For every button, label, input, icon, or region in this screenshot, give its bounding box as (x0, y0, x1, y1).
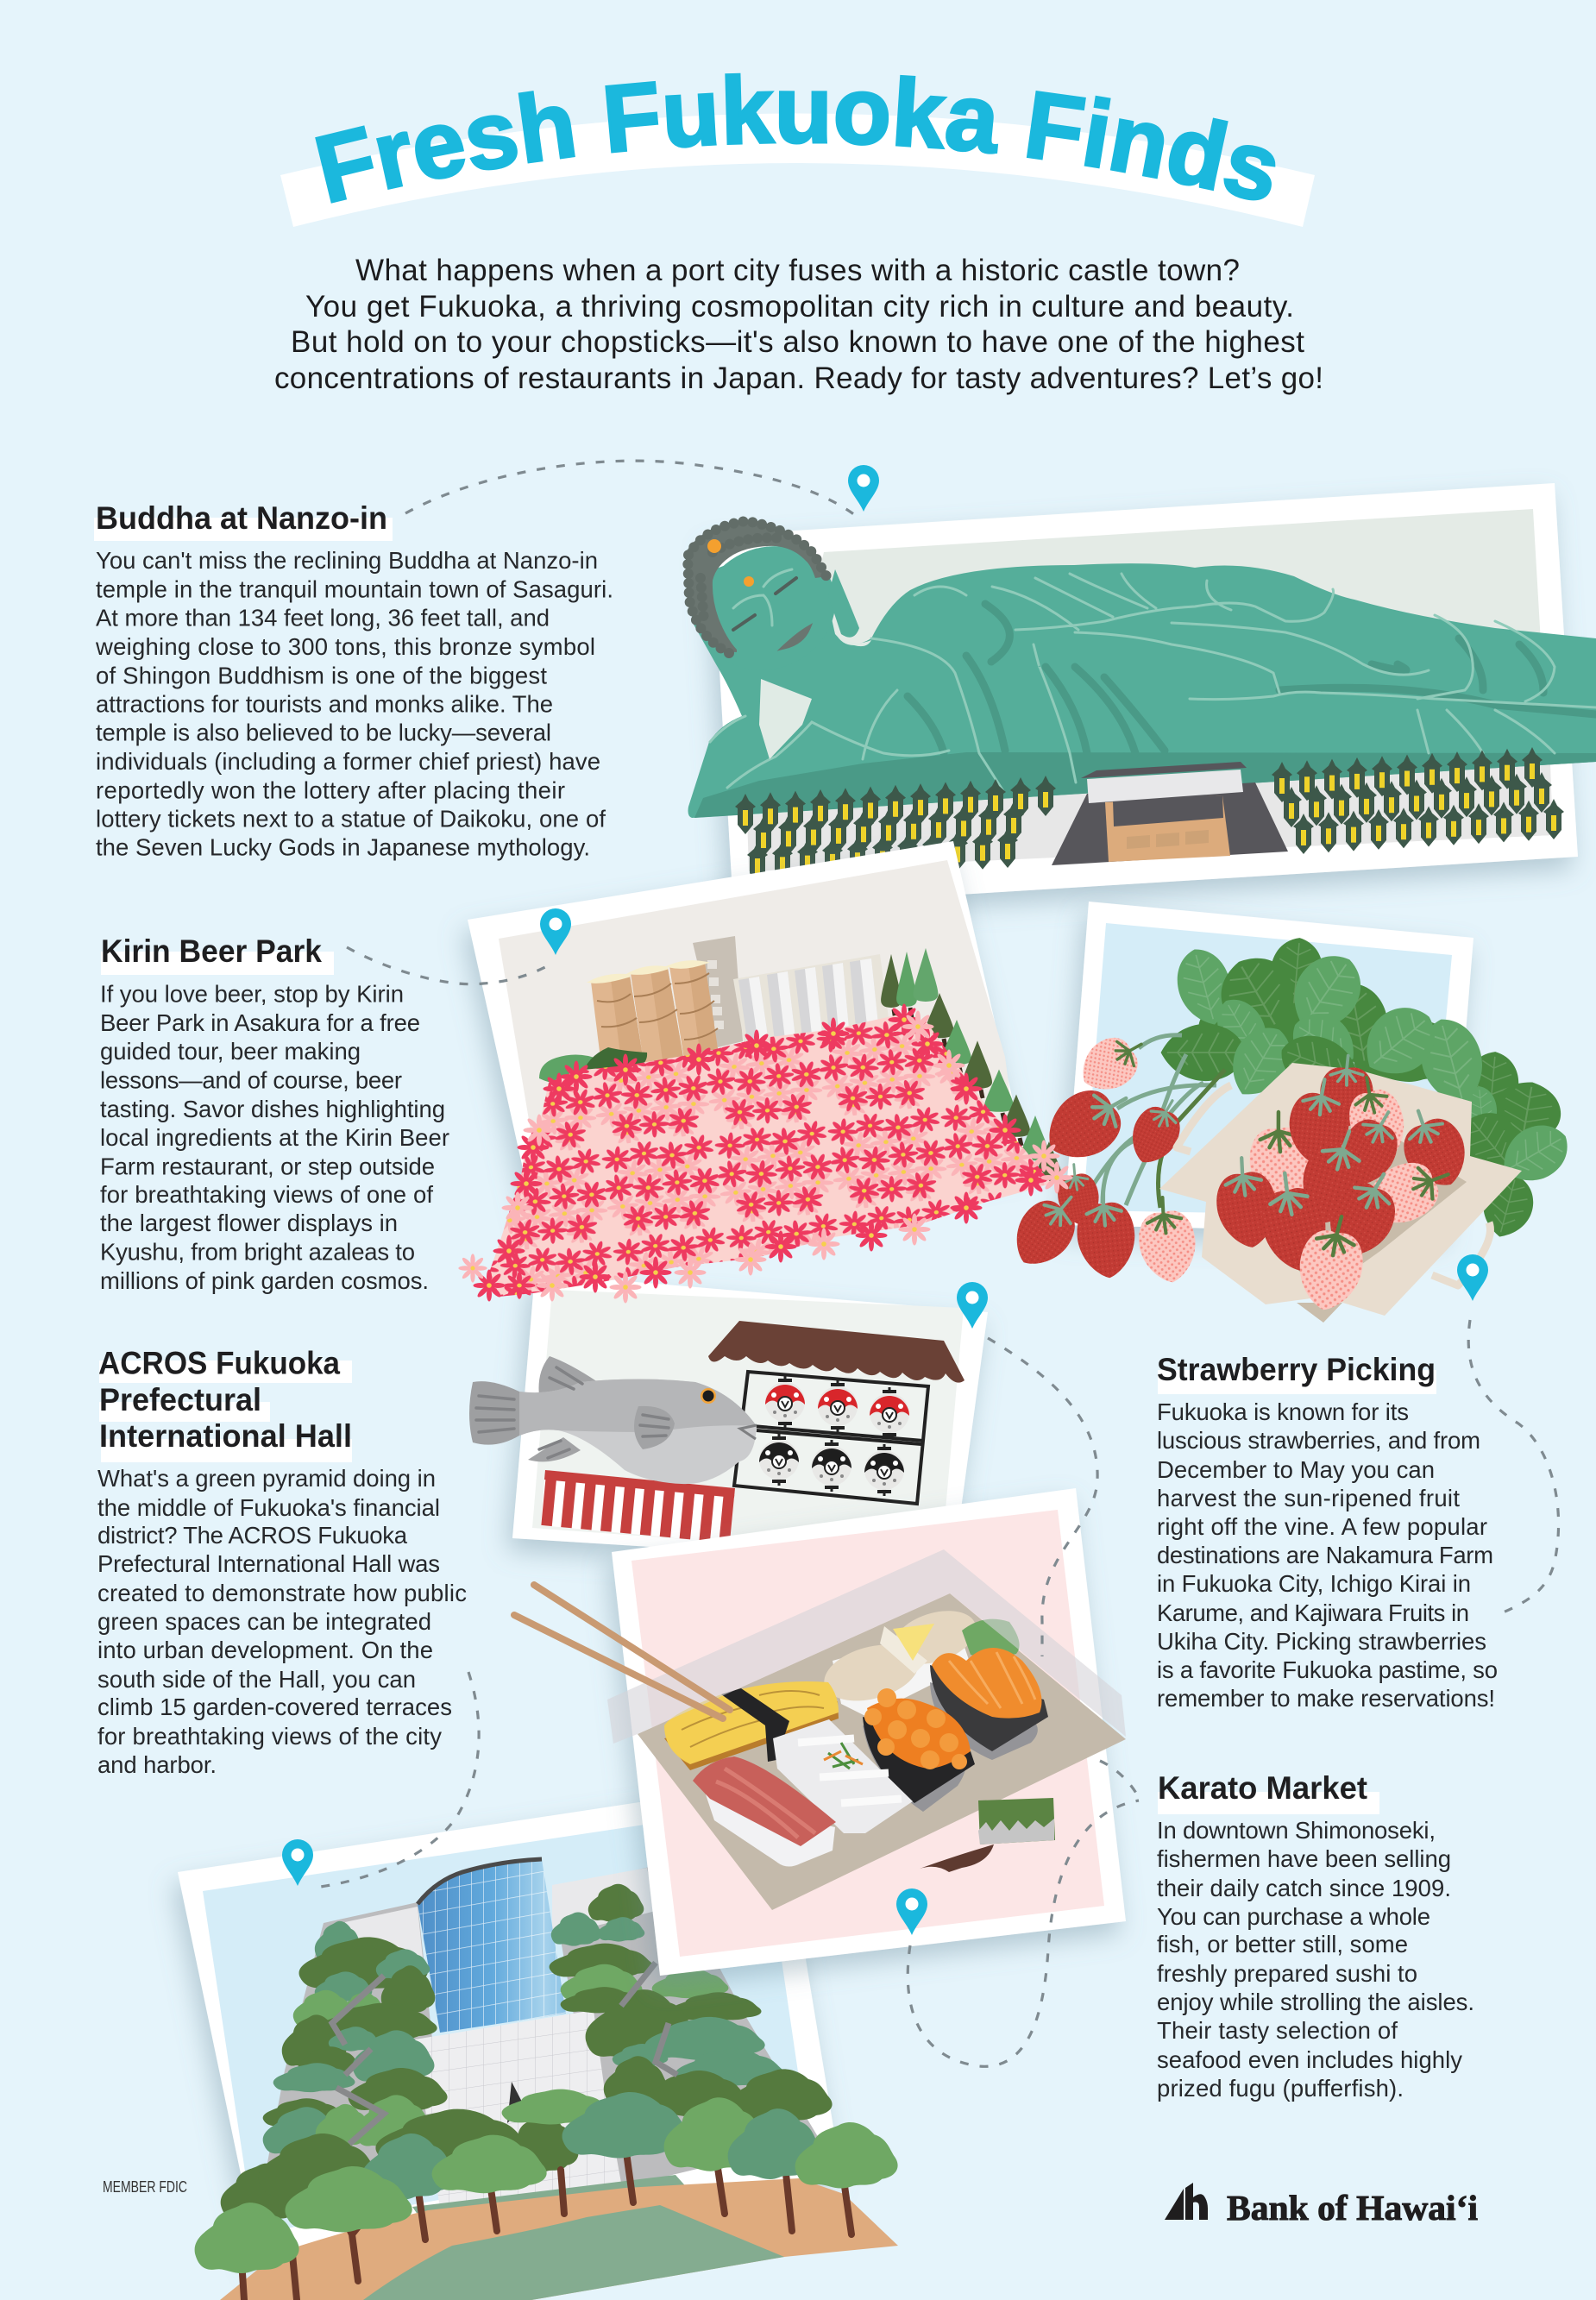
body text: fishermen have been selling (1157, 1845, 1451, 1872)
body text: temple is also believed to be lucky—several (96, 720, 551, 746)
foreground trees (195, 2089, 898, 2300)
brewery buildings (591, 936, 889, 1065)
body text: December to May you can (1157, 1456, 1435, 1483)
conifer trees (881, 948, 1062, 1181)
dashed route: ACROS (314, 1672, 479, 1888)
body text: harvest the sun-ripened fruit (1157, 1485, 1460, 1511)
body text (1157, 1817, 1474, 2102)
reclining Buddha statue (680, 519, 1596, 818)
body text: prized fugu (pufferfish). (1157, 2075, 1404, 2102)
body text: green spaces can be integrated (97, 1608, 431, 1635)
flower field (458, 1004, 1073, 1303)
body text (100, 981, 449, 1294)
heading: Kirin Beer Park (101, 933, 322, 969)
body text: Farm restaurant, or step outside (100, 1153, 435, 1180)
tamago nigiri (664, 1681, 839, 1770)
body text: You can't miss the reclining Buddha at Nanzo-in (96, 547, 598, 574)
body text: enjoy while strolling the aisles. (1157, 1989, 1474, 2015)
text block: Karato Market (1157, 1770, 1474, 2102)
heading: Strawberry Picking (1157, 1352, 1436, 1387)
photo frame (468, 841, 1027, 1242)
temple gate (1052, 762, 1288, 865)
intro text (274, 254, 1323, 395)
baran leaf and soy (920, 1798, 1055, 1872)
logo: Bank of Hawaii (1165, 2183, 1478, 2228)
photo frame (178, 1782, 841, 2260)
dashed route: strawberry (1468, 1320, 1559, 1613)
intro text: But hold on to your chopsticks—it's also known to have one of the highest (291, 325, 1304, 359)
photo panel: Buddha at Nanzo-in (680, 483, 1596, 908)
hanging strawberries (1002, 1023, 1201, 1286)
body text: attractions for tourists and monks alike. The (96, 691, 553, 718)
photo panel: sushi box (514, 1488, 1126, 1976)
photo panel: Karato Market stall (469, 1273, 988, 1566)
body text: millions of pink garden cosmos. (100, 1267, 429, 1294)
stone lanterns (735, 747, 1564, 883)
heading: International Hall (99, 1418, 352, 1454)
body text: Their tasty selection of (1157, 2017, 1398, 2044)
heading: ACROS Fukuoka (98, 1346, 340, 1381)
title: Fresh Fukuoka Finds: Fresh Fukuoka Finds (315, 72, 1275, 204)
body text: remember to make reservations! (1157, 1685, 1495, 1712)
heading: Karato Market (1158, 1770, 1367, 1806)
member FDIC note: MEMBER FDIC (103, 2178, 187, 2196)
body text: In downtown Shimonoseki, (1157, 1817, 1436, 1844)
body text (97, 1465, 467, 1778)
body text: fish, or better still, some (1157, 1931, 1408, 1958)
body text: temple in the tranquil mountain town of Sasaguri. (96, 576, 613, 603)
leaves (1161, 936, 1579, 1243)
cardboard box (1159, 1063, 1522, 1323)
dashed route: Buddha (405, 461, 858, 518)
body text: their daily catch since 1909. (1157, 1875, 1451, 1901)
photo frame (512, 1273, 988, 1566)
body text: lottery tickets next to a statue of Daikoku, one of (96, 806, 606, 833)
body text: At more than 134 feet long, 36 feet tall, and (96, 605, 550, 632)
pufferfish (469, 1356, 757, 1484)
body text: for breathtaking views of the city (97, 1723, 442, 1750)
body text: Beer Park in Asakura for a free (100, 1009, 420, 1036)
body text: Kyushu, from bright azaleas to (100, 1239, 415, 1266)
heading (98, 1346, 352, 1462)
body text: You can purchase a whole (1157, 1903, 1430, 1930)
dashed route: sushi (908, 1800, 1139, 2066)
body text: district? The ACROS Fukuoka (97, 1522, 408, 1549)
head and face (680, 519, 871, 692)
body text: the middle of Fukuoka's financial (97, 1494, 440, 1521)
terrace greenery (263, 1884, 833, 2156)
strawberry plant and box (1002, 936, 1579, 1323)
photo panel: strawberry backdrop (1064, 902, 1473, 1234)
white fish nigiri (773, 1719, 913, 1833)
map pin: Kirin (540, 908, 571, 955)
intro text: You get Fukuoka, a thriving cosmopolitan city rich in culture and beauty. (305, 290, 1294, 324)
wasabi (962, 1619, 1020, 1657)
body text: into urban development. On the (97, 1637, 433, 1663)
body text: and harbor. (97, 1751, 217, 1778)
tray (638, 1593, 1126, 1910)
text block: ACROS Fukuoka Prefectural International Hall (97, 1346, 467, 1778)
body text: local ingredients at the Kirin Beer (100, 1124, 449, 1151)
map pin: ACROS (282, 1839, 313, 1886)
map pin: market stall (957, 1282, 988, 1329)
body text: guided tour, beer making (100, 1038, 361, 1065)
body text: What's a green pyramid doing in (97, 1465, 436, 1492)
body text: individuals (including a former chief priest) have (96, 748, 600, 775)
heading: Buddha at Nanzo-in (96, 500, 387, 536)
red and white stall stripes (541, 1470, 735, 1543)
body text: for breathtaking views of one of (100, 1181, 433, 1208)
dashed route: Kirin (347, 947, 549, 984)
map pin: Buddha (848, 465, 879, 512)
photo panel: Kirin Beer Park (468, 841, 1062, 1242)
photo panel: ACROS Fukuoka (178, 1782, 898, 2300)
body text: Ukiha City. Picking strawberries (1157, 1628, 1486, 1655)
body text: Prefectural International Hall was (97, 1550, 440, 1577)
tuna nigiri (693, 1756, 836, 1867)
body text: created to demonstrate how public (97, 1580, 467, 1606)
intro text: concentrations of restaurants in Japan. Ready for tasty adventures? Let’s go! (274, 361, 1323, 395)
body text: the Seven Lucky Gods in Japanese mythology. (96, 834, 590, 861)
body text: climb 15 garden-covered terraces (97, 1694, 452, 1720)
boxed strawberries (1210, 1056, 1478, 1315)
photo frame (712, 483, 1578, 908)
park ground (220, 2175, 898, 2300)
text block: Buddha at Nanzo-in (94, 500, 613, 861)
body text: south side of the Hall, you can (97, 1666, 416, 1693)
body text: Fukuoka is known for its (1157, 1398, 1409, 1425)
bushes (539, 1047, 647, 1085)
text block: Strawberry Picking (1157, 1352, 1498, 1712)
photo frame (612, 1488, 1126, 1976)
heading: Prefectural (99, 1382, 261, 1417)
text block: Kirin Beer Park (100, 933, 449, 1294)
intro text: What happens when a port city fuses with a historic castle town? (355, 254, 1240, 287)
body text: weighing close to 300 tons, this bronze symbol (95, 633, 595, 660)
body text: right off the vine. A few popular (1157, 1513, 1487, 1540)
body text: If you love beer, stop by Kirin (100, 981, 404, 1008)
body text: Karume, and Kajiwara Fruits in (1157, 1599, 1469, 1626)
uni gunkan (930, 1648, 1048, 1760)
map pin: strawberry (1457, 1254, 1488, 1301)
body text (1157, 1398, 1498, 1712)
body text: seafood even includes highly (1157, 2046, 1462, 2073)
terraces and building (259, 1859, 820, 2209)
lantern shelf (734, 1372, 928, 1504)
stems (1087, 1035, 1216, 1205)
body text: tasting. Savor dishes highlighting (100, 1096, 445, 1122)
body text: luscious strawberries, and from (1157, 1427, 1480, 1454)
body text: lessons—and of course, beer (100, 1067, 402, 1094)
body text: freshly prepared sushi to (1157, 1960, 1417, 1987)
clear box lid (607, 1549, 1126, 1744)
scallop nigiri (818, 1601, 983, 1717)
body text: the largest flower displays in (100, 1210, 398, 1236)
dashed route: market stall (988, 1338, 1140, 1800)
ikura gunkan (863, 1688, 975, 1812)
chopsticks (514, 1585, 730, 1719)
body text: reportedly won the lottery after placing their (96, 776, 565, 803)
body text: in Fukuoka City, Ichigo Kirai in (1157, 1570, 1471, 1597)
body text: is a favorite Fukuoka pastime, so (1157, 1656, 1498, 1683)
body text (95, 547, 613, 861)
logo: Bank of Hawaii: Bank of Hawai‘i (1227, 2188, 1478, 2228)
body text: destinations are Nakamura Farm (1157, 1542, 1493, 1568)
map pin: sushi (896, 1888, 927, 1935)
awning (708, 1321, 965, 1383)
body text: of Shingon Buddhism is one of the biggest (96, 662, 547, 688)
logo icon (1165, 2183, 1208, 2220)
